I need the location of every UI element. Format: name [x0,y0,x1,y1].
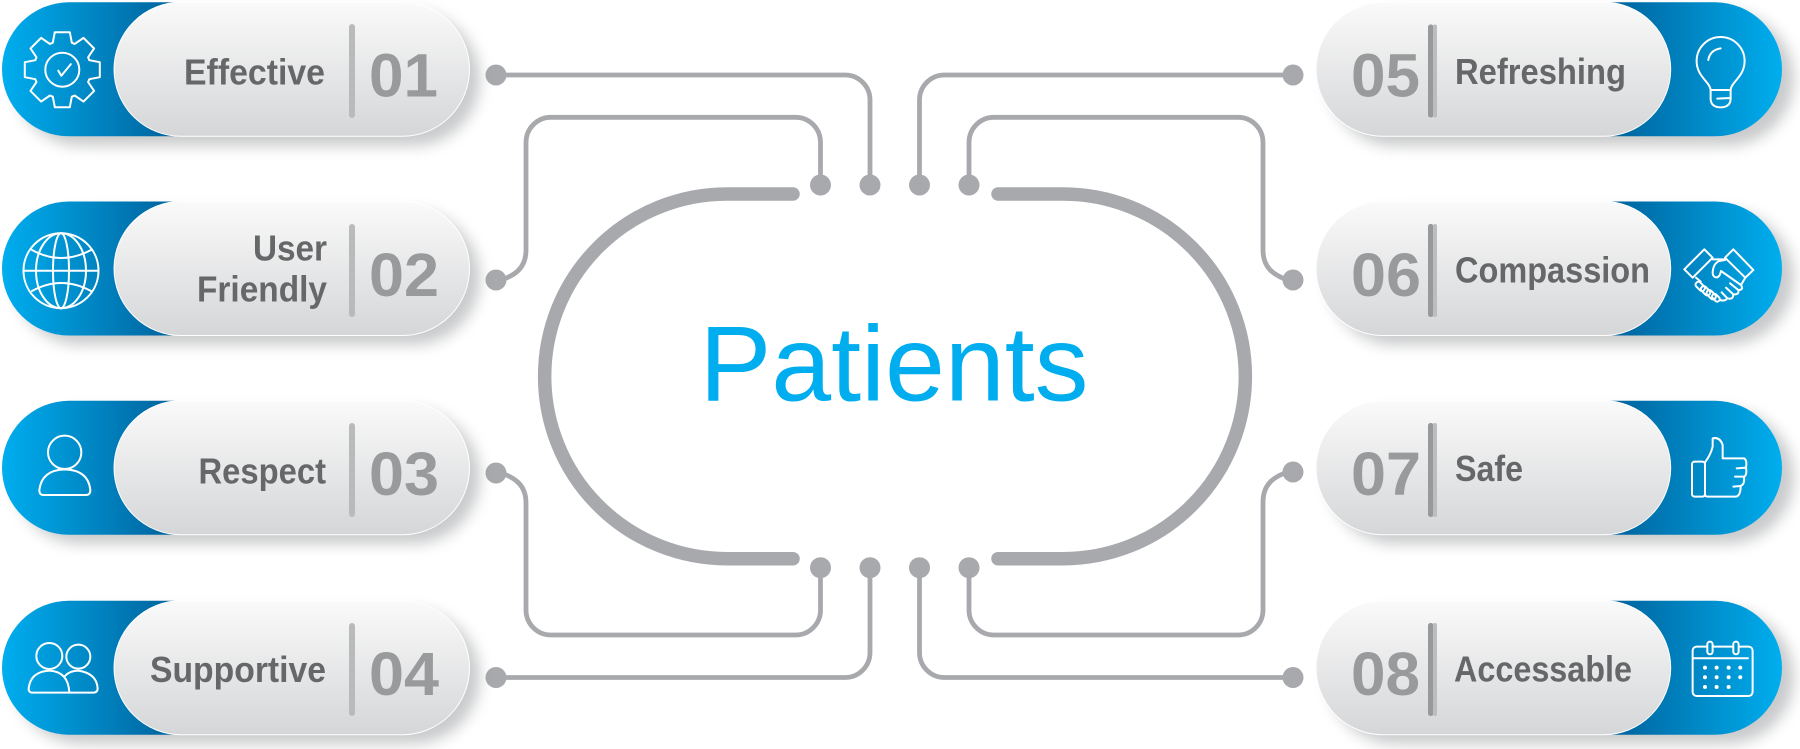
connector 03 [486,462,831,635]
panel: 06 Compassion [1316,202,1794,345]
label: Safe: Safe [1455,448,1523,489]
icon: globe [24,233,98,308]
panel: 04 Supportive [2,601,480,744]
panel: 05 Refreshing [1316,2,1794,146]
icon: person [39,436,90,495]
icon: gear with check [25,32,100,107]
panel: 01 Effective [2,2,480,146]
connector 04 [486,557,880,688]
central ring [545,194,1245,559]
label: User Friendly: Friendly [197,269,327,310]
panel: 08 Accessable [1316,601,1794,744]
number: 07: 07 [1351,440,1421,508]
number: 06: 06 [1351,241,1421,309]
panel: 03 Respect [2,401,480,544]
label: User Friendly: User [253,228,327,269]
connector 02 [486,117,831,290]
number: 02: 02 [369,241,439,309]
label: Respect: Respect [198,450,326,491]
icon: thumbs up [1692,438,1746,497]
label: Accessable: Accessable [1454,649,1632,690]
connector 07 [958,462,1304,635]
title: Patients: Patients [700,304,1088,424]
number: 05: 05 [1351,42,1420,110]
icon: light bulb [1697,37,1745,107]
panel: 07 Safe [1316,401,1794,544]
icon: calendar [1693,642,1753,696]
number: 08: 08 [1351,640,1420,708]
label: User Friendly [197,228,327,310]
number: 04: 04 [369,640,439,708]
connector 08 [909,557,1304,688]
number: 01: 01 [369,42,438,110]
label: Effective: Effective [184,52,325,92]
label: Compassion: Compassion [1455,250,1650,291]
connector 05 [909,64,1304,196]
panel: 02 User Friendly [2,202,480,345]
icon: handshake [1684,249,1753,303]
connector 06 [958,117,1304,290]
number: 03: 03 [369,440,439,508]
connector 01 [486,64,880,196]
label: Supportive: Supportive [150,649,326,690]
label: Refreshing: Refreshing [1455,51,1626,92]
icon: two people [29,643,98,693]
